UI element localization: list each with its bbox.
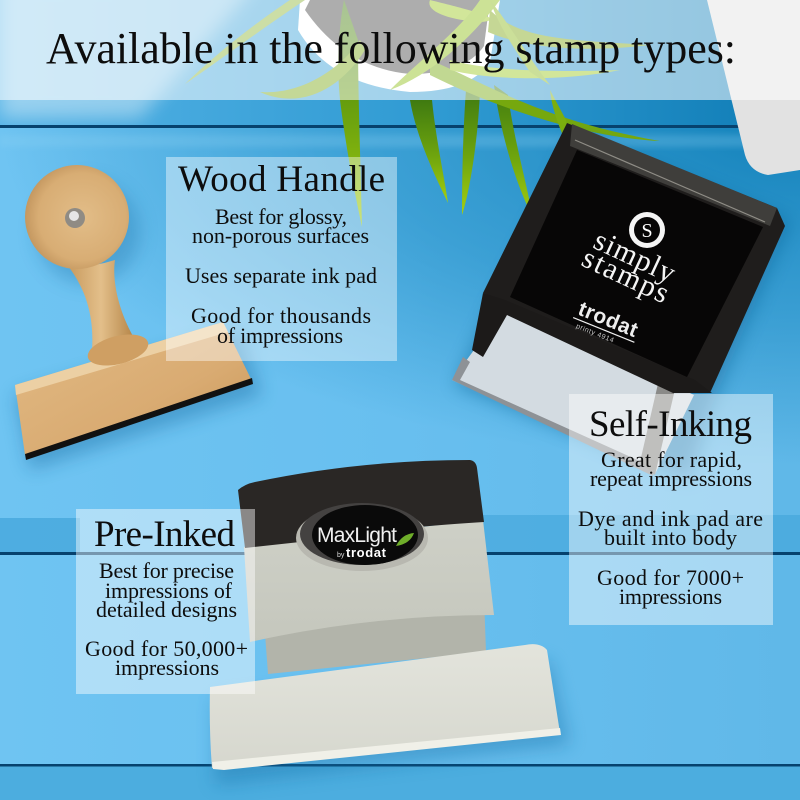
title: Available in the following stamp types: — [46, 24, 736, 73]
handle ball — [25, 165, 129, 269]
text: ink pad: Uses separate ink pad — [185, 263, 377, 288]
text: thousands of impressions: of impressions — [217, 323, 343, 348]
self-inking stamp — [452, 123, 790, 480]
text: rapid impressions — [590, 447, 752, 491]
text: thousands of impressions — [191, 303, 371, 348]
base — [210, 644, 560, 768]
heading: wood handle: Wood Handle — [178, 159, 385, 200]
clear window housing — [452, 305, 694, 474]
black cap — [238, 460, 484, 548]
black label face — [510, 150, 763, 377]
text: precise impressions: impressions of — [105, 578, 233, 603]
heading: pre-inked: Pre-Inked — [94, 514, 236, 555]
text: 7000+ impressions — [597, 565, 744, 609]
text: glossy surfaces: non-porous surfaces — [192, 223, 369, 248]
text: 50,000+ impressions: Good for 50,000+ — [85, 636, 248, 661]
text: 50,000+ impressions: impressions — [115, 655, 219, 680]
wood handle stamp — [15, 165, 262, 470]
simply stamps wordmark: stamps — [577, 241, 674, 310]
text: dye and ink pad — [578, 506, 763, 550]
panel: wood handle — [166, 157, 397, 361]
neck — [264, 596, 486, 674]
top clear edge — [570, 124, 777, 226]
text: precise impressions: Best for precise — [99, 558, 234, 583]
body — [244, 520, 494, 642]
text: 50,000+ impressions — [85, 636, 248, 680]
text: rapid impressions: Great for rapid, — [601, 447, 742, 472]
simply stamps wordmark: simply — [589, 224, 681, 290]
simply stamps seal logo: S — [641, 220, 653, 242]
text: precise impressions: detailed designs — [96, 597, 237, 622]
maxlight badge: MaxLight — [317, 524, 397, 547]
plant pot soil — [305, 0, 490, 74]
text: 7000+ impressions: Good for 7000+ — [597, 565, 744, 590]
text: dye and ink pad: built into body — [604, 525, 737, 550]
rubber strip — [25, 378, 253, 460]
title band — [0, 0, 800, 100]
trodat logo: trodat — [575, 297, 641, 342]
pre-inked stamp — [210, 460, 570, 785]
text: 7000+ impressions: impressions — [619, 584, 722, 609]
metal pin — [65, 208, 85, 228]
maxlight badge — [296, 503, 428, 571]
text: rapid impressions: repeat impressions — [590, 466, 752, 491]
text: thousands of impressions: Good for thousands — [191, 303, 371, 328]
handle collar — [85, 329, 151, 371]
heading: self-inking: Self-Inking — [589, 404, 752, 445]
stamp block — [15, 322, 252, 455]
text: dye and ink pad: Dye and ink pad are — [578, 506, 763, 531]
text: glossy surfaces: Best for glossy, — [215, 204, 347, 229]
monitor corner, top right — [707, 0, 800, 175]
black body — [483, 123, 785, 393]
handle neck — [68, 260, 134, 350]
simply stamps seal logo — [629, 212, 665, 248]
plant pot — [298, 0, 500, 92]
maxlight badge: trodat — [346, 545, 387, 560]
text: glossy surfaces — [192, 204, 369, 248]
trodat logo: printy 4914 — [575, 323, 615, 345]
plant leaves — [185, 0, 660, 227]
panel: pre-inked — [76, 509, 255, 694]
maxlight badge: by — [337, 552, 345, 559]
text: precise impressions — [96, 558, 237, 622]
panel: self-inking — [569, 394, 773, 625]
